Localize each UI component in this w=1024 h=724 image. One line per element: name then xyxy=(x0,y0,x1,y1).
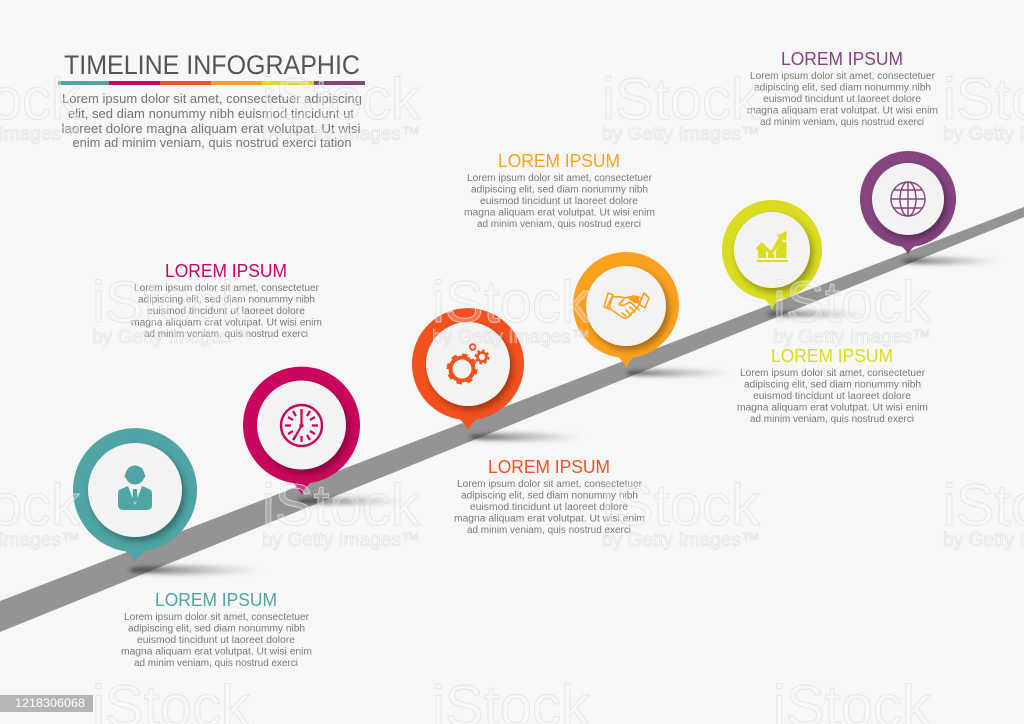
watermarks: by Getty Images™ xyxy=(602,530,760,551)
body 2: adipiscing elit, sed diam nonummy nibh xyxy=(138,294,315,306)
watermarks: by Getty Images™ xyxy=(92,327,250,348)
body 3: Lorem ipsum dolor sit amet, consectetuer xyxy=(457,479,643,490)
pin shadow 3 xyxy=(469,433,585,441)
watermarks: by Getty Images™ xyxy=(432,327,590,348)
text block: step 4 xyxy=(464,151,655,230)
pin shadow 4 xyxy=(626,370,734,376)
body 6: adipiscing elit, sed diam nonummy nibh xyxy=(754,82,931,94)
body 2: euismod tincidunt ut laoreet dolore xyxy=(147,306,305,317)
body 3: adipiscing elit, sed diam nonummy nibh xyxy=(461,490,638,502)
pin body 3 xyxy=(412,308,524,430)
body 3 xyxy=(454,479,645,536)
pin shadow 2 xyxy=(297,497,407,505)
body 4 xyxy=(464,173,655,230)
pin shadow 6 xyxy=(902,258,1002,264)
text block: step 2 xyxy=(131,261,322,340)
watermarks: by Getty Images™ xyxy=(262,124,420,145)
icon: businessman xyxy=(118,466,152,510)
body 6: Lorem ipsum dolor sit amet, consectetuer xyxy=(750,71,936,82)
pin face 6 xyxy=(872,163,944,235)
watermarks: by Getty Images™ xyxy=(262,530,420,551)
pin body 2 xyxy=(243,367,360,495)
step 3: red-orange pin xyxy=(412,308,585,441)
pin body 6 xyxy=(860,151,956,255)
icon: growth chart xyxy=(756,231,788,262)
body 5: magna aliquam erat volutpat. Ut wisi enim xyxy=(737,402,928,414)
body 1: adipiscing elit, sed diam nonummy nibh xyxy=(128,624,305,634)
pin shadow 5 xyxy=(767,310,867,318)
text block: step 6 xyxy=(747,49,938,128)
icon: globe xyxy=(891,182,925,216)
body 2: Lorem ipsum dolor sit amet, consectetuer xyxy=(134,283,320,294)
body 1: euismod tincidunt ut laoreet dolore xyxy=(137,635,295,646)
road xyxy=(0,207,1024,632)
intro paragraph: enim ad minim veniam, quis nostrud exerci tation xyxy=(72,135,352,150)
body 1: magna aliquam erat volutpat. Ut wisi enim xyxy=(121,646,312,658)
title: TIMELINE INFOGRAPHIC xyxy=(64,50,360,80)
body 1 xyxy=(121,612,312,669)
body 4: ad minim veniam, quis nostrud exerci xyxy=(477,219,641,230)
text block: step 5 xyxy=(737,346,928,425)
pin face 3 xyxy=(426,322,510,406)
body 5: adipiscing elit, sed diam nonummy nibh xyxy=(744,380,921,390)
body 2: ad minim veniam, quis nostrud exerci xyxy=(144,329,308,340)
body 5: Lorem ipsum dolor sit amet, consectetuer xyxy=(740,368,926,379)
pin face 1 xyxy=(88,443,182,537)
step 6: purple pin xyxy=(860,151,1002,264)
icon: gears xyxy=(448,344,488,383)
pin body 4 xyxy=(573,252,679,368)
body 3: magna aliquam erat volutpat. Ut wisi enim xyxy=(454,514,645,524)
intro paragraph: laoreet dolore magna aliquam erat volutpat. Ut wisi xyxy=(62,121,361,136)
image id strip xyxy=(0,695,93,712)
step 2: crimson pin xyxy=(243,367,407,505)
body 6: ad minim veniam, quis nostrud exerci xyxy=(760,117,924,128)
watermarks: iStock xyxy=(262,473,421,538)
pin body 1 xyxy=(73,428,197,563)
pin face 2 xyxy=(257,380,346,470)
intro paragraph xyxy=(62,91,362,150)
step 5: yellow-green pin xyxy=(722,200,867,318)
watermarks: iStock xyxy=(432,270,591,335)
body 6: magna aliquam erat volutpat. Ut wisi enim xyxy=(747,106,938,116)
heading 1: LOREM IPSUM xyxy=(155,590,277,610)
body 1: ad minim veniam, quis nostrud exerci xyxy=(134,658,298,669)
watermarks: by Getty Images™ xyxy=(602,124,760,145)
heading 4: LOREM IPSUM xyxy=(498,151,620,171)
icon: handshake xyxy=(604,293,649,318)
body 3: ad minim veniam, quis nostrud exerci xyxy=(467,525,631,536)
body 5 xyxy=(737,368,928,425)
watermarks: iStock xyxy=(262,67,421,132)
pin face 5 xyxy=(734,212,810,288)
pin body 5 xyxy=(722,200,822,310)
watermarks: iStock xyxy=(92,270,251,335)
body 4: adipiscing elit, sed diam nonummy nibh xyxy=(471,184,648,196)
heading 2: LOREM IPSUM xyxy=(165,261,287,281)
watermarks: iStock xyxy=(602,67,761,132)
body 4: magna aliquam erat volutpat. Ut wisi enim xyxy=(464,208,655,218)
pin face 4 xyxy=(586,266,666,346)
colour bar under title xyxy=(58,81,365,85)
heading 5: LOREM IPSUM xyxy=(771,346,893,366)
body 6: euismod tincidunt ut laoreet dolore xyxy=(763,94,921,105)
heading 3: LOREM IPSUM xyxy=(488,457,610,477)
body 2 xyxy=(131,283,322,340)
text block: step 3 xyxy=(454,457,645,536)
body 6 xyxy=(747,71,938,128)
body 1: Lorem ipsum dolor sit amet, consectetuer xyxy=(124,612,310,623)
intro paragraph: Lorem ipsum dolor sit amet, consectetuer adipiscing xyxy=(62,91,362,106)
body 4: Lorem ipsum dolor sit amet, consectetuer xyxy=(467,173,653,184)
watermarks: iStock xyxy=(773,270,932,335)
body 3: euismod tincidunt ut laoreet dolore xyxy=(470,502,628,513)
step 1: teal pin xyxy=(73,428,265,574)
step 4: orange pin xyxy=(573,252,734,376)
image id strip: 1218306068 xyxy=(15,698,85,710)
watermarks: iStock xyxy=(602,473,761,538)
watermarks: by Getty Images™ xyxy=(773,327,931,348)
heading 6: LOREM IPSUM xyxy=(781,49,903,69)
intro paragraph: elit, sed diam nonummy nibh euismod tincidunt ut xyxy=(68,106,354,121)
pin shadow 1 xyxy=(129,566,265,574)
body 5: ad minim veniam, quis nostrud exerci xyxy=(750,414,914,425)
body 5: euismod tincidunt ut laoreet dolore xyxy=(753,391,911,402)
icon: clock xyxy=(281,405,322,446)
body 2: magna aliquam erat volutpat. Ut wisi enim xyxy=(131,318,322,328)
text block: step 1 xyxy=(121,590,312,669)
body 4: euismod tincidunt ut laoreet dolore xyxy=(480,196,638,207)
